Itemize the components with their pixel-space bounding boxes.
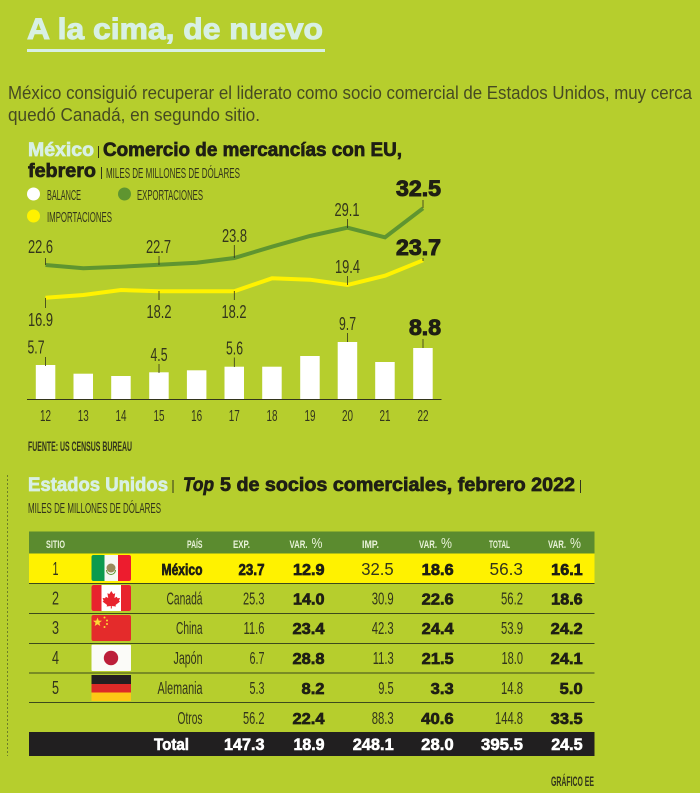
row: Canadá: 18.6 xyxy=(551,592,583,608)
row: China: 23.4 xyxy=(292,621,325,638)
row: Japón: 18.0 xyxy=(502,648,523,668)
row: Alemania: 3.3 xyxy=(431,681,454,698)
year axis labels: 17 xyxy=(229,408,240,425)
row: México: 23.7 xyxy=(238,562,265,579)
table heading: Top xyxy=(183,475,214,496)
table header row: % xyxy=(441,535,452,552)
intro text: quedó Canadá, en segundo sitio. xyxy=(8,105,260,125)
row: Total: 248.1 xyxy=(353,736,394,754)
icon: China flag xyxy=(92,615,131,641)
row: Alemania xyxy=(52,675,583,701)
row: Total: 24.5 xyxy=(551,736,583,754)
row: Total: 18.9 xyxy=(294,736,324,754)
chart heading: México xyxy=(28,140,94,161)
year axis labels: 12 xyxy=(40,408,51,425)
table header row: TOTAL xyxy=(489,539,510,551)
row: Alemania: 5.3 xyxy=(250,678,264,698)
line chart: exports: 29.1 xyxy=(334,200,360,220)
table header row: IMP. xyxy=(362,539,379,551)
row: Japón: 4 xyxy=(52,648,59,668)
row: Otros: Otros xyxy=(178,708,203,728)
line chart: exports xyxy=(28,176,441,268)
chart heading: MILES DE MILLONES DE DÓLARES xyxy=(106,165,240,182)
row: Canadá: 30.9 xyxy=(372,588,394,608)
row: Otros: 56.2 xyxy=(243,708,264,728)
row: Total: 147.3 xyxy=(224,736,264,754)
row: Otros: 88.3 xyxy=(372,708,394,728)
row: Canadá: 2 xyxy=(52,588,59,608)
year axis labels: 20 xyxy=(342,408,353,425)
chart heading: febrero xyxy=(28,161,96,182)
line chart: exports: 32.5 xyxy=(396,176,441,201)
legend: IMPORTACIONES xyxy=(47,210,112,226)
credit: GRÁFICO EE xyxy=(551,774,594,789)
chart heading: Comercio de mercancías con EU, xyxy=(103,140,402,161)
row: Otros xyxy=(178,708,583,728)
row: China: 53.9 xyxy=(501,618,523,638)
row: Alemania: 5 xyxy=(52,678,59,698)
icon: Mexico flag xyxy=(92,555,131,581)
row: Otros: 144.8 xyxy=(495,708,523,728)
row: Japón: 28.8 xyxy=(292,651,325,668)
row: Alemania: 9.5 xyxy=(378,678,394,698)
table header row: % xyxy=(570,535,581,552)
row: Japón: 21.5 xyxy=(422,651,454,668)
row: Alemania: 8.2 xyxy=(302,681,325,698)
row: Japón xyxy=(52,645,583,671)
row: Canadá xyxy=(52,585,583,611)
table header row xyxy=(29,532,594,554)
bar chart: balance: 5.6 xyxy=(226,338,243,358)
bar chart: balance: 9.7 xyxy=(339,314,356,334)
year axis labels: 14 xyxy=(116,408,127,425)
row: Alemania: Alemania xyxy=(158,678,203,698)
line chart: imports: 19.4 xyxy=(335,257,360,277)
row: Japón: 24.1 xyxy=(551,651,583,668)
row: China xyxy=(52,615,583,641)
legend: BALANCE xyxy=(47,188,81,204)
line chart: imports: 18.2 xyxy=(222,302,246,322)
row: Canadá: 14.0 xyxy=(293,592,325,608)
bar chart: balance xyxy=(27,314,442,400)
row: México: 16.1 xyxy=(551,562,583,579)
table heading: Estados Unidos xyxy=(28,475,168,496)
table header row: VAR. xyxy=(290,539,308,551)
row: China: 42.3 xyxy=(372,618,394,638)
row: China: 11.6 xyxy=(244,618,264,638)
row: Otros: 22.4 xyxy=(292,711,325,728)
year axis labels: 16 xyxy=(191,408,202,425)
row: Otros: 40.6 xyxy=(421,711,454,728)
row: Total xyxy=(29,732,594,756)
bar chart: balance: 8.8 xyxy=(409,315,441,340)
row: Canadá: 56.2 xyxy=(501,588,523,608)
row: Japón: Japón xyxy=(174,648,202,668)
legend: EXPORTACIONES xyxy=(137,188,203,204)
line chart: exports: 22.6 xyxy=(28,237,53,257)
table header row: EXP. xyxy=(233,539,250,551)
row: China: 24.4 xyxy=(422,621,454,638)
row: China: 3 xyxy=(52,618,59,638)
table header row: VAR. xyxy=(419,539,437,551)
row: México: 12.9 xyxy=(293,562,325,579)
icon: Germany flag xyxy=(92,675,131,701)
source note: FUENTE: US CENSUS BUREAU xyxy=(28,439,132,454)
row: Canadá: Canadá xyxy=(166,588,203,608)
table heading: 5 de socios comerciales, febrero 2022 xyxy=(220,475,575,496)
bar chart: balance: 4.5 xyxy=(150,345,168,365)
row: México: 56.3 xyxy=(490,559,523,579)
year axis labels: 13 xyxy=(78,408,89,425)
row: Canadá: 25.3 xyxy=(243,588,264,608)
row: Total: 395.5 xyxy=(481,736,523,754)
row: Alemania: 14.8 xyxy=(501,678,523,698)
table header row: SITIO xyxy=(46,539,65,551)
line chart: exports: 23.8 xyxy=(222,226,247,246)
intro text xyxy=(8,83,693,125)
line chart: imports: 23.7 xyxy=(396,235,441,260)
row: México: México xyxy=(162,562,202,579)
year axis labels xyxy=(40,408,428,425)
chart heading xyxy=(28,140,402,182)
bar chart: balance: 5.7 xyxy=(28,338,44,358)
row: Alemania: 5.0 xyxy=(560,681,583,698)
row: México: 1 xyxy=(52,559,58,579)
year axis labels: 19 xyxy=(304,408,316,425)
row: Total: 28.0 xyxy=(421,736,454,754)
icon: Canada flag xyxy=(92,585,131,611)
table heading: MILES DE MILLONES DE DÓLARES xyxy=(28,500,161,517)
year axis labels: 18 xyxy=(266,408,278,425)
line chart: imports: 18.2 xyxy=(146,302,172,322)
row: México xyxy=(52,555,583,581)
line chart: exports: 22.7 xyxy=(146,237,171,257)
row: Japón: 11.3 xyxy=(373,648,394,668)
year axis labels: 15 xyxy=(154,408,164,425)
table header row: PAÍS xyxy=(187,538,202,551)
row: México: 32.5 xyxy=(361,559,394,579)
table xyxy=(29,532,594,756)
year axis labels: 21 xyxy=(380,408,390,425)
row: México: 18.6 xyxy=(422,562,454,579)
row: Japón: 6.7 xyxy=(250,648,264,668)
row: Otros: 33.5 xyxy=(551,711,583,728)
line chart: imports xyxy=(28,235,441,330)
table heading xyxy=(28,475,581,517)
icon: Japan flag xyxy=(92,645,131,671)
row: Total: Total xyxy=(154,736,189,754)
row: Canadá: 22.6 xyxy=(422,592,454,608)
row: China: 24.2 xyxy=(551,621,583,638)
table header row: VAR. xyxy=(548,539,566,551)
title: A la cima, de nuevo xyxy=(27,13,323,46)
line chart: imports: 16.9 xyxy=(28,310,53,330)
year axis labels: 22 xyxy=(418,408,428,425)
legend xyxy=(27,188,203,226)
row: China: China xyxy=(176,618,203,638)
table header row: % xyxy=(312,535,322,552)
